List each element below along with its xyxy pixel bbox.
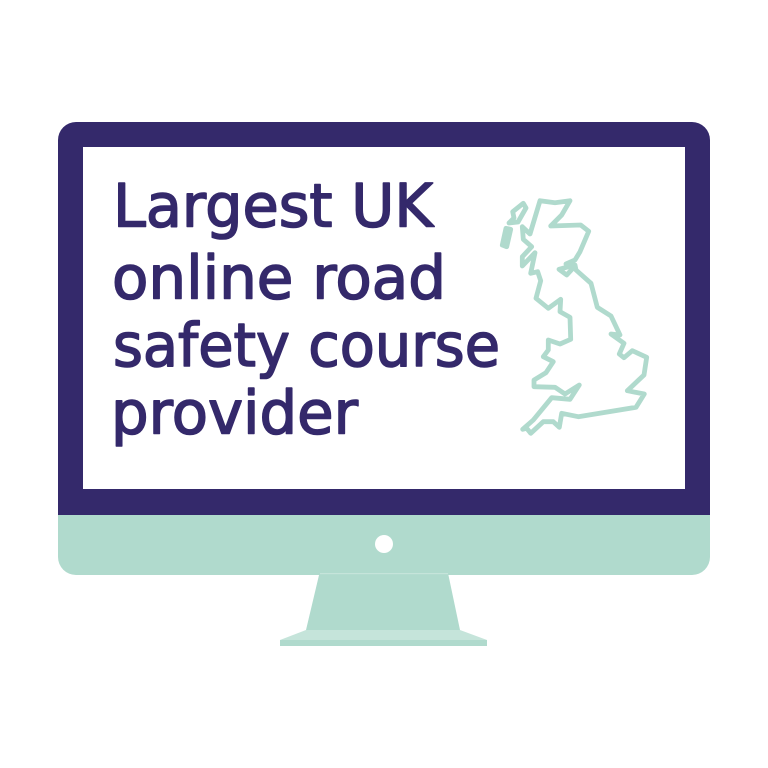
- headline: online road: [112, 244, 446, 314]
- monitor bezel: [58, 122, 710, 515]
- Hebrides island: [509, 203, 526, 223]
- monitor stand: [280, 573, 487, 646]
- headline: provider: [111, 378, 358, 448]
- headline: [111, 172, 500, 448]
- icon: UK map outline: [502, 201, 647, 433]
- power button: [375, 535, 393, 553]
- monitor: [58, 122, 710, 646]
- headline: safety course: [113, 311, 500, 381]
- Outer island: [502, 228, 511, 247]
- screen: [83, 147, 685, 489]
- stand highlight: [320, 573, 448, 574]
- monitor chin: [58, 515, 710, 575]
- mainland Britain: [522, 201, 647, 433]
- headline: Largest UK: [113, 172, 435, 242]
